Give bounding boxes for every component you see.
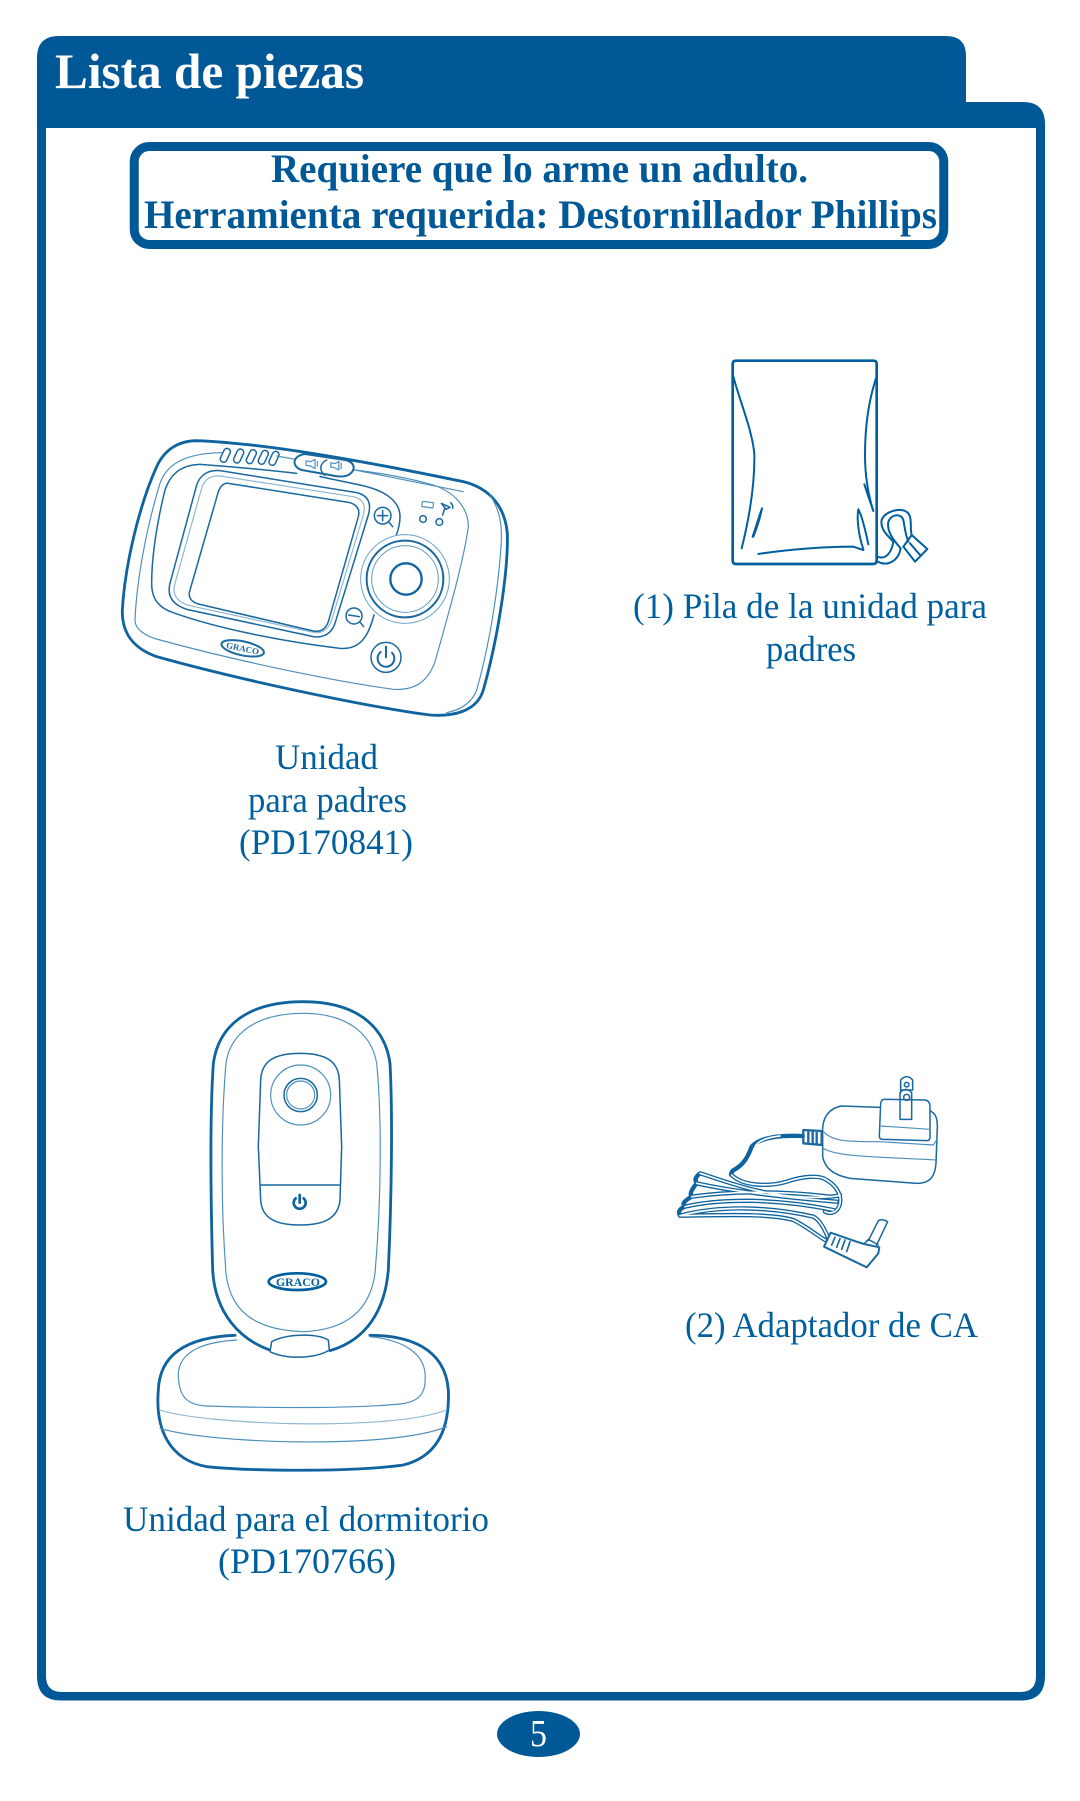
caption: parent unit (239, 737, 413, 862)
cord strain relief (803, 1130, 822, 1145)
battery connector cord (878, 510, 927, 564)
stand base (158, 1335, 448, 1470)
power button (371, 642, 401, 672)
caption: parent unit: para padres (248, 780, 407, 820)
caption: battery (633, 586, 987, 669)
speaker slots (219, 447, 280, 466)
Graco logo (220, 637, 265, 660)
callout: adult assembly notice (134, 146, 944, 244)
illustration: nursery unit camera (158, 1002, 448, 1470)
page number: 5 (530, 1713, 547, 1755)
caption: battery: (1) Pila de la unidad para (633, 586, 987, 626)
indicator lights (420, 501, 453, 525)
illustration: battery pack (733, 361, 927, 564)
camera face panel (258, 1053, 342, 1225)
callout: adult assembly notice: Requiere que lo arme un adulto. (271, 146, 808, 191)
Graco logo (269, 1273, 326, 1290)
Graco logo: GRACO (276, 1275, 320, 1289)
adapter housing (823, 1099, 937, 1183)
caption: nursery unit (123, 1499, 489, 1581)
caption: nursery unit: Unidad para el dormitorio (123, 1499, 489, 1539)
caption: battery: padres (766, 629, 856, 669)
power icon (294, 1195, 306, 1209)
navigation dial (361, 535, 449, 623)
Graco logo: GRACO (225, 640, 260, 657)
callout: adult assembly notice: Herramienta requerida: Destornillador Phillips (144, 192, 937, 237)
zoom buttons (346, 507, 393, 627)
coiled cable (679, 1136, 840, 1240)
caption: nursery unit: (PD170766) (218, 1541, 396, 1581)
screen (169, 470, 370, 637)
volume buttons (295, 454, 354, 477)
right-angle barrel plug (824, 1220, 888, 1267)
caption: parent unit: Unidad (275, 737, 378, 777)
title: Lista de piezas (55, 43, 364, 99)
caption: parent unit: (PD170841) (239, 822, 413, 862)
caption: AC adapter: (2) Adaptador de CA (685, 1305, 978, 1345)
plug prongs (900, 1077, 913, 1119)
page number (497, 1711, 580, 1757)
parent unit body (122, 441, 507, 715)
illustration: AC adapter (679, 1077, 937, 1267)
camera body (211, 1002, 392, 1357)
battery bag (733, 361, 877, 564)
illustration: parent unit (122, 441, 507, 715)
